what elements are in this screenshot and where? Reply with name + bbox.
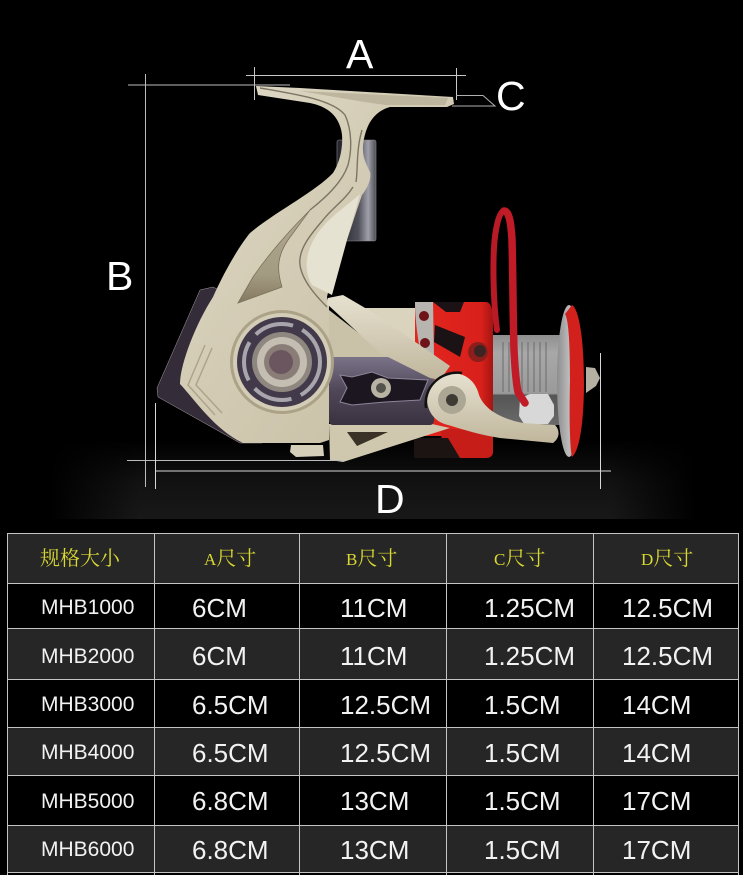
row MHB1000: MHB1000 bbox=[41, 596, 134, 619]
row MHB5000: 6.8CM bbox=[192, 786, 269, 816]
reel: upper rotor arm bbox=[327, 295, 450, 380]
reel: rotor hub screw bbox=[438, 386, 466, 414]
table row fills bbox=[8, 534, 738, 872]
row MHB4000: 6.5CM bbox=[192, 738, 269, 768]
reel: dark skirt underside bbox=[414, 438, 460, 458]
row MHB1000: 1.25CM bbox=[484, 593, 575, 623]
reel: frame contour lines bbox=[260, 88, 362, 307]
reel: panel screw bbox=[371, 378, 391, 398]
row MHB4000: 1.5CM bbox=[484, 738, 561, 768]
reel: lower red skirt bbox=[440, 428, 493, 458]
row MHB5000: 17CM bbox=[622, 786, 691, 816]
row MHB3000: 6.5CM bbox=[192, 690, 269, 720]
label D: D bbox=[375, 476, 405, 522]
reel: panel black inset bbox=[340, 372, 428, 405]
row MHB4000: 12.5CM bbox=[340, 738, 431, 768]
row MHB3000: MHB3000 bbox=[41, 693, 134, 716]
label B: B bbox=[106, 253, 133, 299]
reel: red bail wire right bbox=[504, 211, 525, 403]
reel: skirt black marks bbox=[433, 302, 465, 357]
reel: lower cream strip and arm bbox=[329, 424, 450, 462]
row MHB3000: 1.5CM bbox=[484, 690, 561, 720]
reel: grey rear cylinder bbox=[337, 140, 376, 241]
table header bbox=[40, 547, 693, 570]
reel: lower foot block bbox=[290, 445, 324, 457]
table header: A尺寸 bbox=[204, 547, 256, 570]
reel: lower arm dark wedge bbox=[347, 432, 388, 446]
dimension C lines bbox=[452, 96, 495, 106]
reel: silver flange bbox=[557, 305, 581, 457]
reel: cream body cylinder bbox=[360, 308, 420, 368]
row MHB4000: MHB4000 bbox=[41, 741, 134, 764]
table header: B尺寸 bbox=[346, 547, 397, 570]
row MHB3000: 14CM bbox=[622, 690, 691, 720]
row MHB5000 bbox=[41, 786, 691, 816]
row MHB3000 bbox=[41, 690, 691, 720]
reel: rotor hub and tail bbox=[427, 373, 559, 443]
table header: D尺寸 bbox=[641, 547, 693, 570]
label A: A bbox=[346, 31, 374, 77]
row MHB5000: 13CM bbox=[340, 786, 409, 816]
row MHB1000: 11CM bbox=[340, 593, 407, 623]
reel: bearing assembly bbox=[230, 310, 334, 414]
reel: red bail wire left bbox=[493, 211, 504, 330]
reel: silver line roller nut bbox=[519, 394, 554, 424]
reel: skirt logo bbox=[468, 342, 488, 362]
reel: spool line grooves bbox=[503, 342, 546, 392]
dimension lines bbox=[127, 67, 611, 489]
row MHB2000 bbox=[41, 641, 713, 671]
row MHB6000: 17CM bbox=[622, 835, 691, 865]
row MHB3000: 12.5CM bbox=[340, 690, 431, 720]
row MHB5000: MHB5000 bbox=[41, 790, 134, 813]
reel: grey spool line bbox=[490, 335, 562, 425]
row MHB2000: MHB2000 bbox=[41, 645, 134, 668]
table header: 规格大小 bbox=[40, 547, 121, 570]
row MHB2000: 12.5CM bbox=[622, 641, 713, 671]
size table bbox=[8, 533, 738, 875]
reel: main gold frame bbox=[180, 86, 454, 443]
row MHB6000: 13CM bbox=[340, 835, 409, 865]
reel: red flange rim bbox=[565, 305, 584, 457]
row MHB2000: 1.25CM bbox=[484, 641, 575, 671]
row MHB1000: 12.5CM bbox=[622, 593, 713, 623]
label C: C bbox=[496, 73, 526, 119]
reel: frame light strip bbox=[307, 194, 360, 295]
row MHB4000 bbox=[41, 738, 691, 768]
fishing reel illustration bbox=[157, 86, 600, 462]
table header: C尺寸 bbox=[494, 547, 545, 570]
reel: drag knob tip bbox=[586, 367, 600, 393]
row MHB5000: 1.5CM bbox=[484, 786, 561, 816]
reel: silver skirt band bbox=[415, 302, 434, 356]
reel: cream arm gusset bbox=[329, 310, 392, 359]
row MHB2000: 6CM bbox=[192, 641, 247, 671]
reel: dark purple center panel bbox=[329, 357, 434, 425]
table grid bbox=[8, 533, 738, 875]
dimension B lines bbox=[127, 74, 343, 487]
dimension D lines bbox=[155, 353, 611, 489]
row MHB6000: 1.5CM bbox=[484, 835, 561, 865]
reel: foot highlight bbox=[300, 91, 448, 105]
row MHB6000: 6.8CM bbox=[192, 835, 269, 865]
reel: body side ribs bbox=[188, 345, 222, 415]
row MHB6000 bbox=[41, 835, 691, 865]
reel: dark side cover bbox=[157, 287, 262, 443]
dimension A lines bbox=[246, 67, 466, 100]
reel: frame wedge bbox=[238, 210, 310, 303]
row MHB2000: 11CM bbox=[340, 641, 407, 671]
row MHB4000: 14CM bbox=[622, 738, 691, 768]
reel: band holes bbox=[419, 311, 430, 348]
row MHB6000: MHB6000 bbox=[41, 838, 134, 861]
reel: red spool skirt bbox=[415, 302, 493, 436]
row MHB1000: 6CM bbox=[192, 593, 247, 623]
reel: rotor hub black outline bbox=[426, 373, 462, 408]
row MHB1000 bbox=[41, 593, 713, 623]
